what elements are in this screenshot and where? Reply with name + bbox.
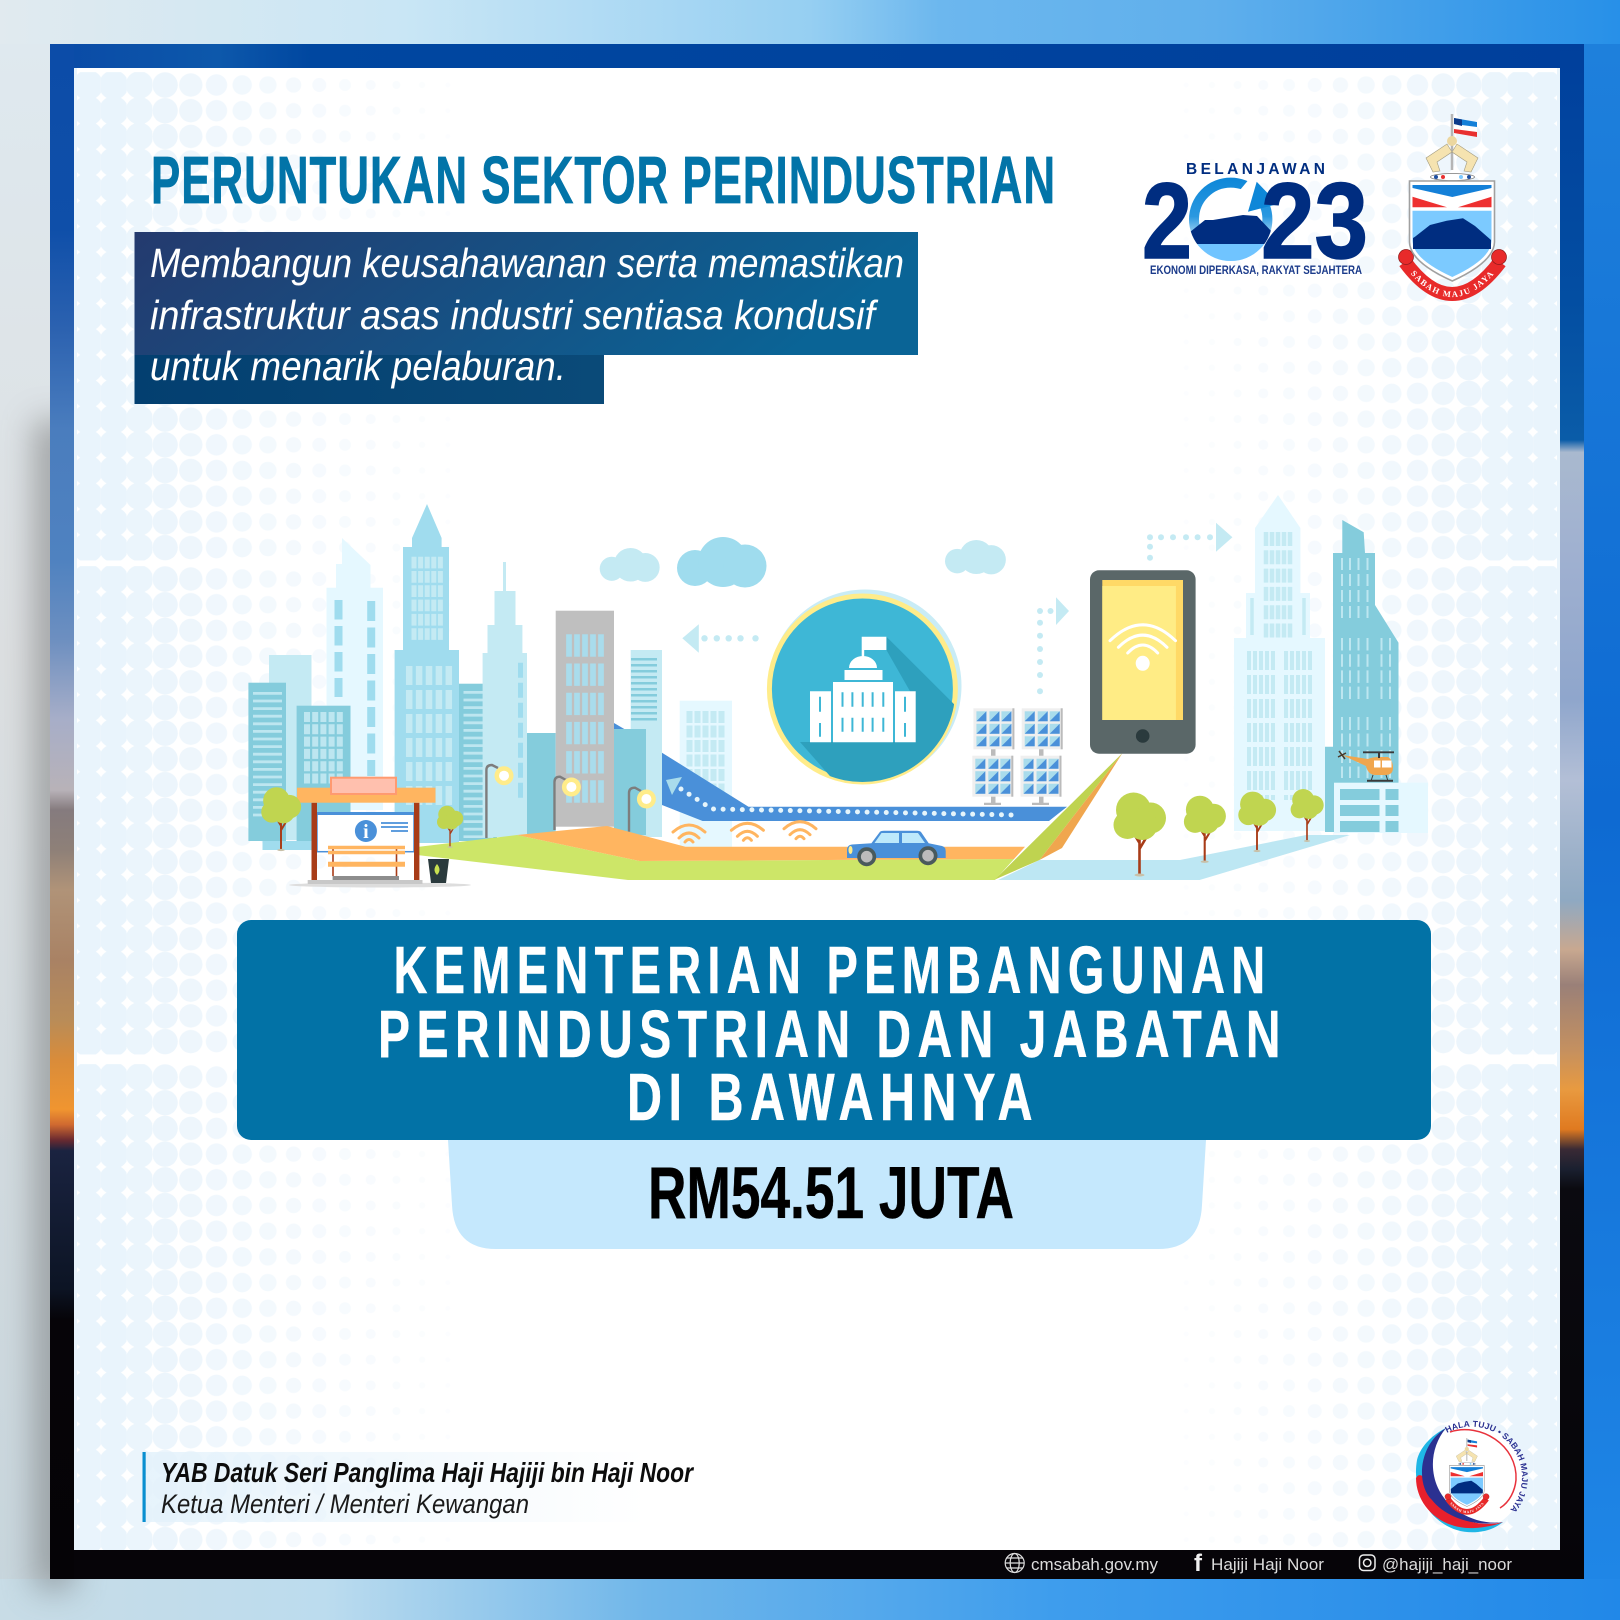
road with dotted arrow: [662, 753, 1067, 821]
trash bin: [428, 859, 449, 883]
panel: ministry name: PERINDUSTRIAN DAN JABATAN: [378, 997, 1287, 1072]
instagram handle: @hajiji_haji_noor: [1382, 1555, 1512, 1574]
skyline: right towers: [1234, 495, 1428, 833]
subtitle block: [134, 232, 918, 404]
facebook name: Hajiji Haji Noor: [1211, 1555, 1324, 1574]
signatory block: Ketua Menteri / Menteri Kewangan: [161, 1489, 529, 1519]
clouds: [600, 537, 1006, 588]
car: [847, 831, 946, 866]
arrow: dotted top right: [1147, 523, 1232, 561]
icon: facebook: f: [1194, 1550, 1203, 1577]
subtitle block: infrastruktur asas industri sentiasa kondusif: [150, 292, 878, 338]
bus stop: [289, 777, 471, 888]
logo: Hala Tuju Sabah Maju Jaya: HALA TUJU • SABAH MAJU JAYA: [1444, 1420, 1528, 1512]
logo: Belanjawan 2023: 2: [1142, 160, 1192, 281]
arrow: dotted left: [682, 624, 759, 653]
icon: smartphone with wifi: [1090, 570, 1196, 754]
bus stop: i: [363, 821, 369, 843]
panel: allocation amount: [448, 1140, 1206, 1249]
footer social links: [74, 1550, 1560, 1579]
skyline: left towers: [248, 504, 527, 850]
subtitle block: Membangun keusahawanan serta memastikan: [150, 240, 904, 286]
icon: globe: [1005, 1554, 1024, 1572]
panel: ministry name: DI BAWAHNYA: [627, 1060, 1039, 1135]
street lamps: [486, 765, 656, 838]
logo: Belanjawan 2023: [1142, 160, 1368, 281]
icon: government building in circle: [766, 590, 962, 784]
logo: Sabah coat of arms: [1398, 114, 1507, 301]
solar panels: [972, 708, 1063, 805]
panel: ministry name: [237, 920, 1431, 1140]
signatory block: YAB Datuk Seri Panglima Haji Hajiji bin Haji Noor: [161, 1457, 695, 1488]
panel: allocation amount: RM54.51 JUTA: [648, 1153, 1014, 1234]
signatory block: [142, 1452, 695, 1522]
skyline: centre towers: [527, 611, 732, 847]
logo: Sabah coat of arms: SABAH MAJU JAYA: [1411, 270, 1494, 298]
panel: ministry name: KEMENTERIAN PEMBANGUNAN: [394, 933, 1272, 1008]
icon: instagram: [1360, 1555, 1375, 1570]
arrow: dotted up to the right of panels: [1037, 597, 1069, 694]
ground: green and orange road band: [417, 753, 1350, 880]
logo: Belanjawan 2023: BELANJAWAN: [1186, 161, 1325, 178]
subtitle block: untuk menarik pelaburan.: [150, 343, 566, 389]
helicopter: [1338, 751, 1394, 781]
logo: Belanjawan 2023: 0: [1204, 160, 1258, 281]
trees: [261, 787, 1324, 876]
wifi signals on road: [673, 822, 816, 842]
logo: Belanjawan 2023: EKONOMI DIPERKASA, RAKYAT SEJAHTERA: [1150, 264, 1363, 277]
website: cmsabah.gov.my: [1031, 1555, 1158, 1574]
title: PERUNTUKAN SEKTOR PERINDUSTRIAN: [151, 143, 1056, 218]
logo: Belanjawan 2023: 23: [1261, 160, 1368, 281]
city illustration: [248, 495, 1428, 888]
logo: Hala Tuju Sabah Maju Jaya: [1416, 1420, 1528, 1532]
